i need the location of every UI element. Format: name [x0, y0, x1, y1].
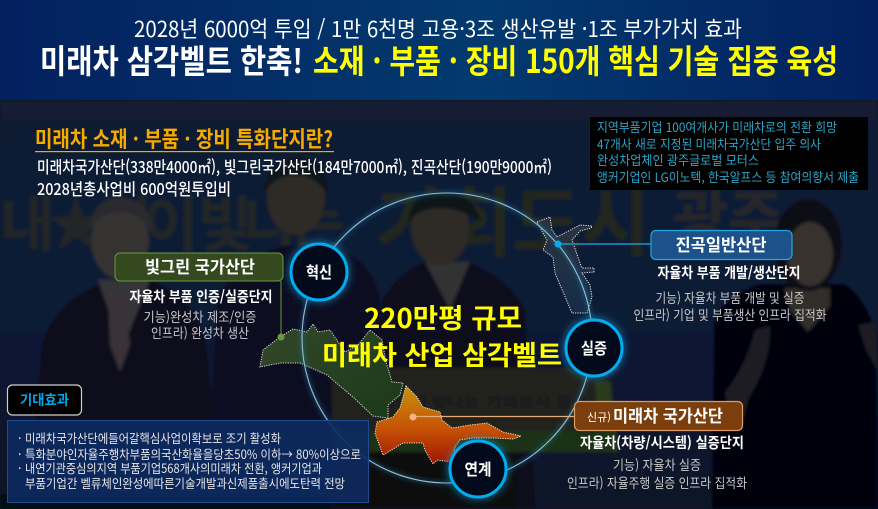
header banner [0, 0, 878, 100]
node: 실증 [563, 317, 625, 379]
photo background: 기회도시 [375, 162, 650, 272]
callout: companies: 지역부품기업 100여개사가 미래차로의 전환 희망 [597, 117, 837, 136]
map: blue district [537, 217, 594, 313]
effects panel: 미래차국가산단에들어갈핵심사업이확보로 조기 활성화 [25, 428, 281, 447]
callout: companies: 앵커기업인 LG이노텍, 한국알프스 등 참여의향서 제출 [597, 167, 859, 186]
panel: 빛그린: 인프라) 완성차 생산 [151, 322, 249, 342]
panel: 빛그린: 빛그린 국가산단 [145, 253, 255, 278]
node: 혁신: 혁신 [306, 259, 332, 283]
expected effects [8, 385, 368, 502]
panel: 빛그린: 기능)완성차 제조/인증 [144, 306, 256, 326]
effects panel: · [18, 458, 22, 477]
woman [712, 284, 878, 509]
centre man and lectern [372, 262, 535, 509]
centre headline: 미래차 산업 삼각벨트 [322, 334, 562, 373]
panel: 미래차 국가산단: 기능) 자율차 실증 [613, 454, 701, 474]
effects panel: 부품기업간 벨류체인완성에따른기술개발과신제품출시에도탄력 전망 [25, 473, 345, 492]
panel: 미래차 국가산단 [410, 402, 747, 492]
map: green district [260, 324, 403, 418]
photo background: 내★일이 빛나는 [0, 177, 345, 264]
panel: 진곡 [554, 230, 826, 324]
panel: 진곡: 진곡일반산단 [676, 231, 767, 256]
map: orange district [375, 386, 521, 464]
effects panel [8, 420, 368, 502]
panel: 진곡: 인프라) 기업 및 부품생산 인프라 집적화 [634, 304, 826, 324]
badge: 기대효과: 기대효과 [20, 390, 69, 410]
callout: companies: 완성차업체인 광주글로벌 모터스 [597, 150, 759, 169]
callout: companies [590, 117, 868, 190]
definition block: 2028년총사업비 600억원투입비 [37, 176, 231, 200]
panel: 빛그린: 자율차 부품 인증/실증단지 [130, 286, 272, 307]
effects panel: · [18, 428, 22, 447]
photo background: 광주 [672, 171, 784, 258]
panel: 미래차 국가산단: 인프라) 자율주행 실증 인프라 집적화 [567, 472, 747, 492]
node: 혁신 [288, 241, 350, 303]
panel: 미래차 국가산단: 신규) [587, 409, 611, 425]
node: 실증: 실증 [581, 335, 607, 359]
badge: 기대효과 [8, 385, 82, 415]
effects panel: 특화분야인자율주행차부품의국산화율을당초50% 이하→ 80%이상으로 [25, 444, 361, 463]
node: 연계 [447, 438, 509, 500]
panel: 미래차 국가산단: 자율차(차량/시스템) 실증단지 [580, 432, 744, 453]
panel: 빛그린 [115, 253, 284, 342]
left man [28, 280, 222, 509]
centre headline: 220만평 규모 [364, 297, 522, 336]
middle man [205, 245, 390, 509]
triangle belt ring [302, 193, 592, 483]
definition block [35, 122, 552, 200]
callout: companies: 47개사 새로 지정된 미래차국가산단 입주 의사 [597, 134, 821, 153]
panel: 미래차 국가산단: 미래차 국가산단 [613, 402, 723, 427]
effects panel: · [18, 444, 22, 463]
centre headline [322, 297, 562, 373]
photo background: 내일이 빛나는 기회도시 광주 [378, 392, 588, 412]
definition text: 미래차국가산단(338만4000㎡), 빛그린국가산단(184만7000㎡), 진곡산단(190만9000㎡) [37, 154, 552, 178]
effects panel: 내연기관중심의지역 부품기업568개사의미래차 전환, 앵커기업과 [25, 458, 322, 477]
node: 연계: 연계 [464, 456, 492, 480]
header title white: 미래차 삼각벨트 한축! [40, 35, 303, 83]
header subtitle: 2028년 6000억 투입 / 1만 6천명 고용·3조 생산유발 ·1조 부가가치 효과 [134, 12, 742, 44]
panel: 진곡: 자율차 부품 개발/생산단지 [658, 262, 800, 283]
panel: 진곡: 기능) 자율차 부품 개발 및 실증 [656, 287, 804, 307]
definition heading: 미래차 소재 · 부품 · 장비 특화단지란? [35, 122, 333, 154]
